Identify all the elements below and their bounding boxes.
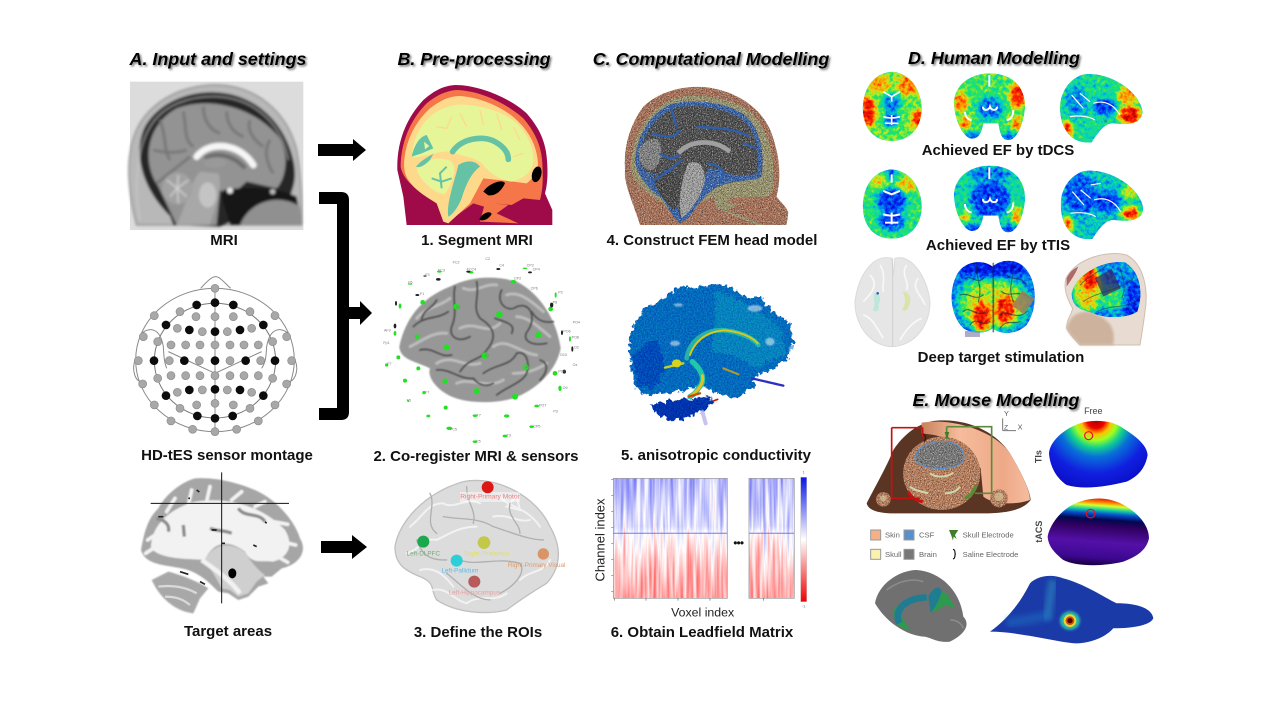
legend: tissue types and electrodes: Skull Electrode (963, 530, 1014, 539)
map: tDCS axial (861, 72, 925, 141)
caption: Deep target stimulation: Deep target stimulation (918, 349, 1084, 366)
axis indicator XYZ: X (1018, 422, 1023, 431)
panel: co-registered brain with sensors: F5 (407, 399, 411, 403)
panel: co-registered brain with sensors: T3 (507, 434, 511, 438)
ROI: left pallidum (442, 555, 478, 575)
caption: Achieved EF by tTIS: Achieved EF by tTIS (926, 237, 1070, 254)
panel: achieved EF by tDCS brain maps (861, 72, 1143, 143)
arrow: target areas to ROIs (321, 535, 367, 559)
panel: deep target stimulation images (855, 254, 1146, 347)
legend: tissue types and electrodes (871, 530, 1018, 559)
ROI: left pallidum: Left-Pallidum (442, 568, 478, 575)
caption: MRI: MRI (210, 232, 238, 249)
panel: co-registered brain with sensors: P (526, 365, 529, 369)
panel: co-registered brain with sensors: AF3 (384, 329, 391, 333)
caption: 5. anisotropic conductivity: 5. anisotropic conductivity (621, 447, 812, 464)
panel: co-registered brain with sensors: F3 (425, 273, 430, 277)
panel: co-registered brain with sensors: CP5 (533, 425, 540, 429)
panel: co-registered brain with sensors: F7 (425, 390, 429, 394)
ROI: right thalamus: Right-Thalamus (464, 550, 509, 557)
glass brain with deep targets (855, 258, 930, 347)
axis label: Channel index: Channel index (592, 498, 607, 582)
heatmap: left block (611, 478, 727, 601)
axis indicator XYZ: Z (1004, 424, 1008, 431)
panel: TIs and tACS field maps: tACS (1034, 521, 1044, 543)
caption: 4. Construct FEM head model: 4. Construct FEM head model (607, 232, 817, 249)
panel: achieved EF by tTIS brain maps (863, 165, 1144, 240)
panel: co-registered brain with sensors: P8 (553, 300, 557, 304)
panel: co-registered brain with sensors: CP2 (527, 264, 534, 268)
panel: FEM head model (625, 87, 788, 225)
panel: anisotropic conductivity tractography (628, 285, 794, 423)
legend: tissue types and electrodes: Saline Electrode (963, 550, 1018, 559)
axis indicator XYZ: Y (1004, 409, 1009, 418)
panel: segmented MRI head (397, 85, 552, 225)
panel: co-registered brain with sensors: O2 (574, 346, 579, 350)
map: tDCS sagittal (1060, 73, 1143, 143)
panel: co-registered brain with sensors: F7 (387, 362, 392, 366)
ROI: left DLPFC (407, 536, 440, 557)
panel: co-registered brain with sensors: CP2 (514, 276, 521, 280)
jet brain with electrode patch (948, 258, 1038, 337)
ROI: left DLPFC: Left-DLPFC (407, 550, 440, 557)
panel: co-registered brain with sensors: PO8 (572, 335, 579, 339)
panel: co-registered brain with sensors: FC2 (453, 260, 460, 264)
panel: TIs and tACS field maps: TIs (1033, 450, 1043, 463)
caption: HD-tES sensor montage: HD-tES sensor montage (141, 447, 313, 464)
colour bar: 1 (803, 469, 806, 474)
legend: tissue types and electrodes: Skin (885, 530, 900, 539)
heading: E. Mouse Modelling: E. Mouse Modelling (913, 390, 1080, 410)
panel: co-registered brain with sensors: O9 (563, 386, 568, 390)
panel: co-registered brain with sensors: O10 (560, 353, 567, 357)
panel: co-registered brain with sensors: FC3 (438, 268, 445, 272)
caption: Achieved EF by tDCS: Achieved EF by tDCS (922, 142, 1074, 159)
axis label: Voxel index: Voxel index (671, 606, 735, 620)
ROI: right primary motor (460, 481, 521, 501)
map: tTIS sagittal (1061, 170, 1144, 240)
heatmap: right block (749, 478, 794, 601)
ROI: right primary visual: Right-Primary Visual (508, 562, 565, 569)
panel: co-registered brain with sensors: P2 (558, 290, 563, 294)
panel: target areas brain slice with crosshair (141, 472, 303, 613)
panel: co-registered brain with sensors: T7 (477, 414, 481, 418)
legend: tissue types and electrodes: Skull (885, 550, 902, 559)
panel: co-registered brain with sensors (383, 257, 580, 444)
caption: 3. Define the ROIs: 3. Define the ROIs (414, 624, 542, 641)
heading: B. Pre-processing: B. Pre-processing (397, 49, 551, 69)
panel: co-registered brain with sensors: CP4 (533, 268, 540, 272)
panel: co-registered brain with sensors: C2 (485, 257, 490, 261)
panel: co-registered brain with sensors: C1 (456, 305, 461, 309)
panel: co-registered brain with sensors: PO6 (563, 329, 571, 333)
caption: 1. Segment MRI: 1. Segment MRI (421, 232, 533, 249)
map: tTIS coronal (954, 166, 1026, 234)
panel: HD-tES sensor montage (134, 277, 297, 436)
ellipsis between blocks: ••• (733, 538, 744, 550)
heading: C. Computational Modelling: C. Computational Modelling (593, 49, 829, 69)
panel: co-registered brain with sensors: FCC4 (467, 268, 476, 272)
heading: D. Human Modelling: D. Human Modelling (908, 48, 1080, 68)
panel: co-registered brain with sensors: PO4 (573, 320, 580, 324)
panel: co-registered brain with sensors: C4 (499, 264, 504, 268)
map: tTIS axial (863, 165, 923, 239)
ROI: left hippocampus (449, 576, 500, 597)
caption: 6. Obtain Leadfield Matrix: 6. Obtain Leadfield Matrix (611, 624, 794, 641)
caption: Target areas: Target areas (184, 623, 272, 640)
ROI: left hippocampus: Left-Hippocampus (449, 590, 500, 597)
head with translucent skull and jet brain (1065, 254, 1146, 345)
panel: co-registered brain with sensors: PO7 (558, 370, 566, 374)
arrow: bracket merging MRI and sensors (319, 192, 372, 420)
panel: co-registered brain with sensors: C5 (476, 440, 481, 444)
arrow: MRI to segmentation (318, 139, 366, 161)
caption: 2. Co-register MRI & sensors: 2. Co-register MRI & sensors (373, 448, 579, 465)
colour bar (801, 469, 807, 608)
heading: A. Input and settings: A. Input and settings (129, 49, 307, 69)
panel: glass brain with ROIs (395, 480, 565, 613)
panel: MRI sagittal scan (129, 82, 303, 230)
panel: TIs and tACS field maps: Free (1084, 406, 1103, 416)
axis indicator XYZ (1003, 409, 1023, 431)
legend: tissue types and electrodes: CSF (919, 530, 935, 539)
panel: co-registered brain with sensors: Oz (573, 363, 577, 367)
panel: co-registered brain with sensors: Cz (485, 354, 490, 358)
panel: co-registered brain with sensors: Fp1 (383, 341, 390, 345)
ROI: right thalamus (464, 536, 509, 557)
panel: co-registered brain with sensors: CP6 (531, 286, 538, 290)
panel: TIs and tACS field maps (1033, 406, 1149, 565)
panel: leadfield matrix heatmap (592, 469, 807, 620)
legend: tissue types and electrodes: Brain (919, 550, 937, 559)
panel: co-registered brain with sensors: P3 (553, 409, 558, 413)
map: tDCS coronal (953, 73, 1027, 141)
panel: mouse field heat map with focal hot spot (990, 576, 1153, 643)
panel: co-registered brain with sensors: FC5 (450, 428, 457, 432)
panel: mouse brain with target structure (875, 570, 967, 642)
panel: co-registered brain with sensors: PO7 (539, 404, 546, 408)
ROI: right primary visual (508, 548, 565, 569)
panel: co-registered brain with sensors: F1 (420, 292, 424, 296)
panel: co-registered brain with sensors: F5 (408, 280, 413, 284)
ROI: right primary motor: Right-Primary Motor (460, 494, 521, 501)
colour bar: -1 (802, 603, 806, 608)
panel: mouse head model (867, 420, 1031, 513)
